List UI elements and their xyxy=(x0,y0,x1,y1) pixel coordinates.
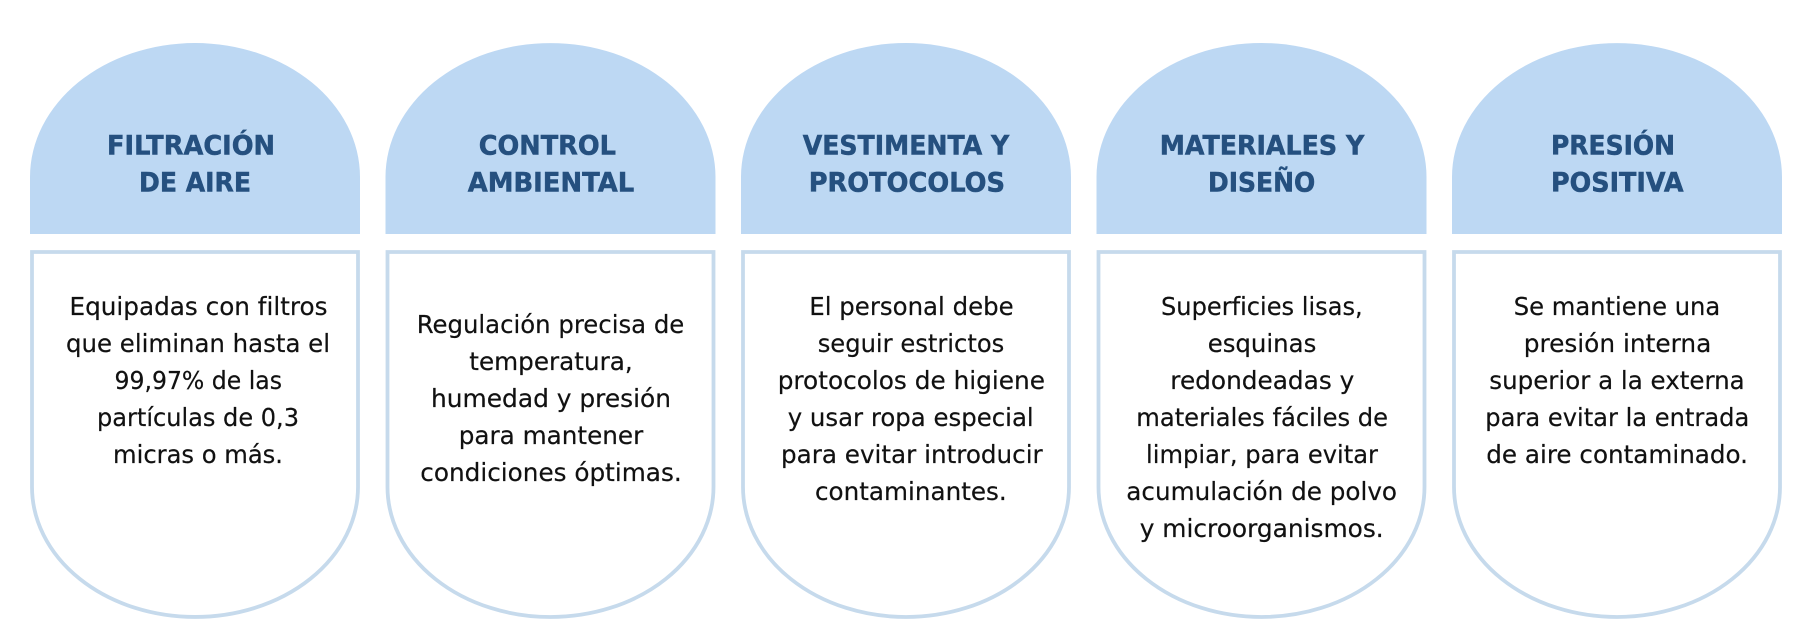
body text 4 xyxy=(1126,292,1397,543)
panel: filtración de aire xyxy=(30,43,360,617)
header shape 2 xyxy=(386,43,716,234)
heading 1 xyxy=(107,129,275,198)
heading 5: PRESIÓN xyxy=(1551,129,1675,161)
body text 3: para evitar introducir xyxy=(781,440,1043,469)
body shape 2 xyxy=(388,252,714,617)
body text 4: esquinas xyxy=(1208,329,1316,358)
body text 3: y usar ropa especial xyxy=(788,403,1034,432)
heading 2: CONTROL xyxy=(479,130,616,161)
body text 3: protocolos de higiene xyxy=(778,366,1045,395)
header shape 1 xyxy=(30,43,360,234)
body text 1: micras o más. xyxy=(113,440,283,469)
body text 1: partículas de 0,3 xyxy=(97,403,299,432)
header shape 5 xyxy=(1452,43,1782,234)
heading 4: DISEÑO xyxy=(1208,166,1315,198)
heading 5: POSITIVA xyxy=(1551,167,1684,198)
heading 4: MATERIALES Y xyxy=(1160,130,1365,161)
body text 5: para evitar la entrada xyxy=(1485,403,1749,432)
body text 4: y microorganismos. xyxy=(1140,514,1384,543)
body shape 5 xyxy=(1454,252,1780,617)
body shape 3 xyxy=(743,252,1069,617)
body text 1: que eliminan hasta el xyxy=(66,329,330,358)
body text 2 xyxy=(417,310,684,487)
panel: vestimenta y protocolos xyxy=(741,43,1071,617)
body text 4: materiales fáciles de xyxy=(1136,403,1388,432)
body shape 4 xyxy=(1098,252,1424,617)
heading 2: AMBIENTAL xyxy=(468,167,634,198)
body text 2: humedad y presión xyxy=(431,384,671,413)
heading 1: DE AIRE xyxy=(139,167,251,198)
body text 4: redondeadas y xyxy=(1170,366,1354,395)
panel: materiales y diseño xyxy=(1096,43,1426,617)
body text 3 xyxy=(778,292,1045,506)
heading 5 xyxy=(1551,129,1684,198)
body text 5: presión interna xyxy=(1524,329,1711,358)
body text 2: temperatura, xyxy=(469,347,633,376)
body text 1: Equipadas con filtros xyxy=(70,292,328,321)
body text 3: El personal debe xyxy=(809,292,1014,321)
body text 5: Se mantiene una xyxy=(1514,292,1720,321)
header shape 3 xyxy=(741,43,1071,234)
body text 3: contaminantes. xyxy=(815,477,1007,506)
body text 2: para mantener xyxy=(459,421,644,450)
heading 2 xyxy=(468,130,634,198)
heading 3 xyxy=(803,130,1010,198)
panel: presión positiva xyxy=(1452,43,1782,617)
body text 5: de aire contaminado. xyxy=(1486,440,1748,469)
body text 4: Superficies lisas, xyxy=(1161,292,1363,321)
body text 3: seguir estrictos xyxy=(818,329,1004,358)
body text 4: limpiar, para evitar xyxy=(1146,440,1379,469)
body text 5: superior a la externa xyxy=(1489,366,1745,395)
body text 5 xyxy=(1485,292,1749,469)
panel: control ambiental xyxy=(386,43,716,617)
heading 1: FILTRACIÓN xyxy=(107,129,275,161)
heading 3: VESTIMENTA Y xyxy=(803,130,1010,161)
body text 2: Regulación precisa de xyxy=(417,310,684,339)
body text 1: 99,97% de las xyxy=(114,366,282,395)
heading 3: PROTOCOLOS xyxy=(809,167,1005,198)
body text 1 xyxy=(66,292,330,469)
body text 2: condiciones óptimas. xyxy=(420,458,682,487)
body text 4: acumulación de polvo xyxy=(1126,477,1397,506)
header shape 4 xyxy=(1096,43,1426,234)
heading 4 xyxy=(1160,130,1365,198)
body shape 1 xyxy=(32,252,358,617)
